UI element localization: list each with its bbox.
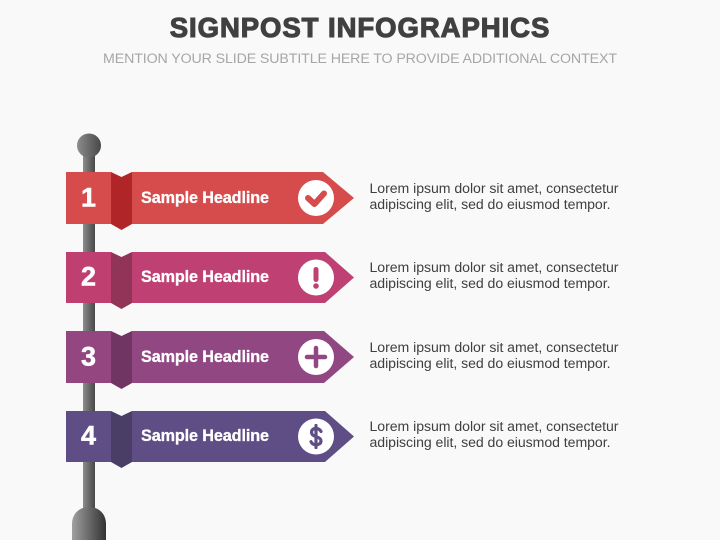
- icon: plus: [298, 339, 334, 375]
- body text 1 line 2: adipiscing elit, sed do eiusmod tempor.: [370, 196, 610, 212]
- arrow banner 4: [132, 411, 354, 462]
- ribbon fold 2: [111, 252, 132, 309]
- sign 4: [66, 411, 354, 468]
- number 1: 1: [81, 182, 96, 212]
- number block 2: [66, 252, 111, 303]
- arrow banner 2: [132, 252, 354, 303]
- headline 3: Sample Headline: [141, 348, 269, 366]
- subtitle: MENTION YOUR SLIDE SUBTITLE HERE TO PROVIDE ADDITIONAL CONTEXT: [103, 51, 617, 67]
- body text 2 line 2: adipiscing elit, sed do eiusmod tempor.: [370, 275, 610, 291]
- sign 2: [66, 252, 354, 309]
- ribbon fold 4: [111, 411, 132, 468]
- sign 3: [66, 331, 354, 389]
- number block 1: [66, 172, 111, 224]
- number 2: 2: [81, 262, 96, 292]
- number 4: 4: [81, 420, 96, 450]
- headline 1: Sample Headline: [141, 189, 269, 207]
- ribbon fold 3: [111, 331, 132, 389]
- icon: dollar sign: [298, 418, 334, 454]
- body text 1: Lorem ipsum dolor sit amet, consectetur: [370, 180, 619, 196]
- number block 3: [66, 331, 111, 383]
- body text 2: Lorem ipsum dolor sit amet, consectetur: [370, 259, 619, 275]
- ribbon fold 1: [111, 172, 132, 230]
- number 3: 3: [81, 342, 96, 372]
- arrow banner 3: [132, 331, 354, 383]
- body text 3 line 2: adipiscing elit, sed do eiusmod tempor.: [370, 355, 610, 371]
- body text 4 line 2: adipiscing elit, sed do eiusmod tempor.: [370, 434, 610, 450]
- signpost pole: [72, 134, 106, 540]
- headline 2: Sample Headline: [141, 268, 269, 286]
- icon: exclamation mark: [298, 260, 334, 296]
- title: SIGNPOST INFOGRAPHICS: [170, 12, 550, 43]
- body text 3: Lorem ipsum dolor sit amet, consectetur: [370, 339, 619, 355]
- sign 1: [66, 172, 354, 230]
- arrow banner 1: [132, 172, 354, 224]
- icon: check mark: [298, 180, 334, 216]
- body text 4: Lorem ipsum dolor sit amet, consectetur: [370, 418, 619, 434]
- headline 4: Sample Headline: [141, 427, 269, 445]
- number block 4: [66, 411, 111, 462]
